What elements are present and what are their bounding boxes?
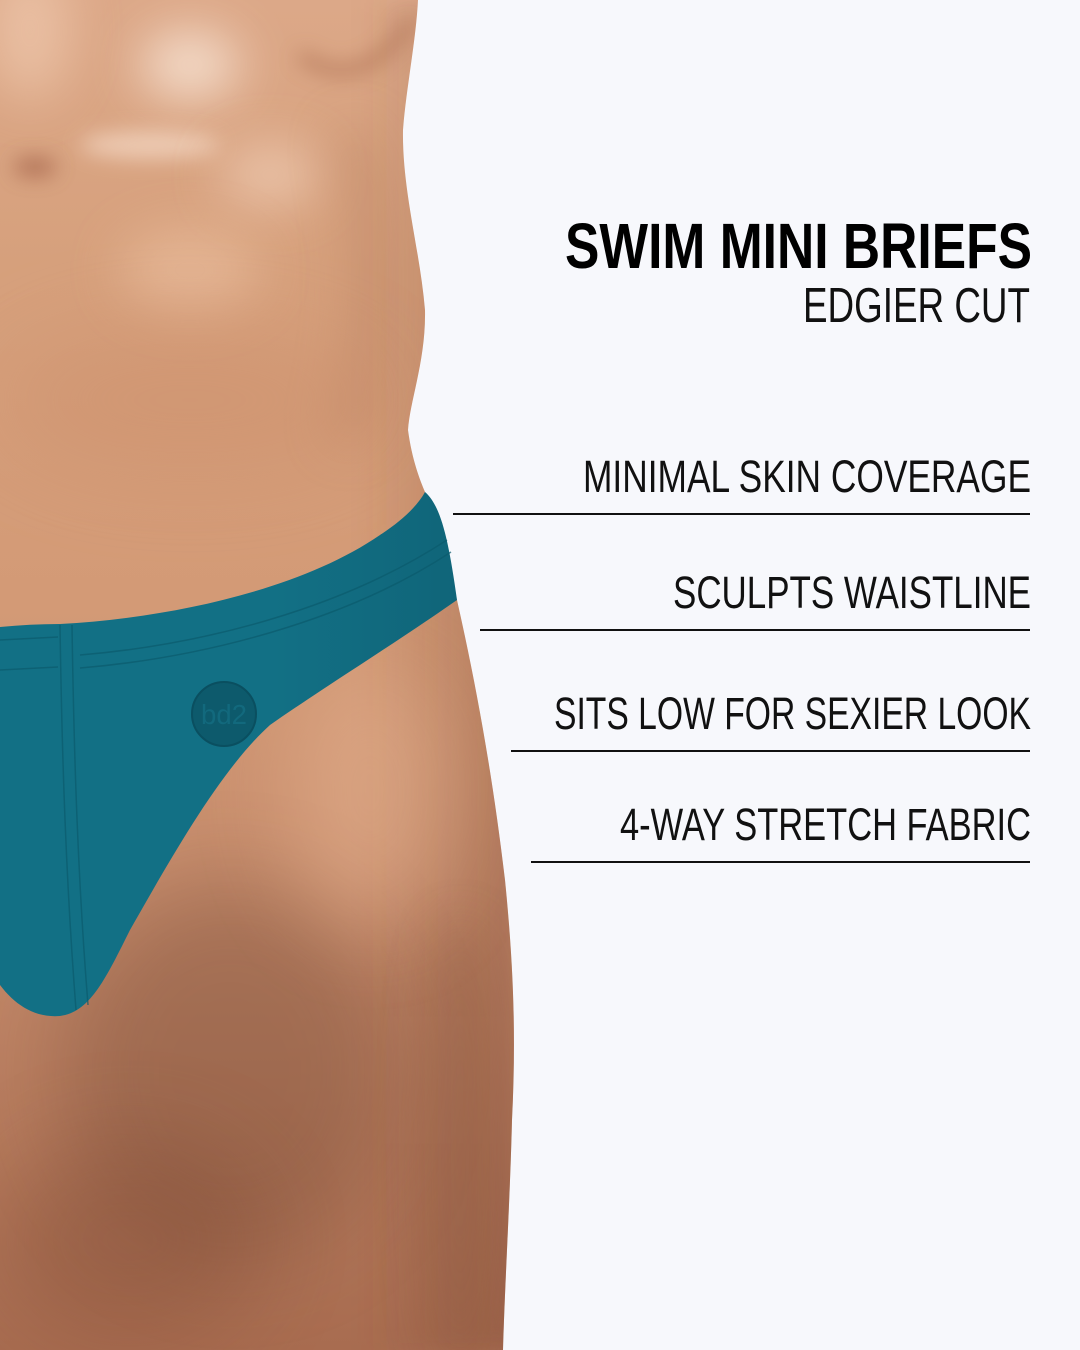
photo: model torso and thigh — [0, 0, 520, 1350]
garment stitching — [0, 540, 451, 1010]
garment: teal swim mini briefs — [0, 492, 457, 1016]
icon: round logo badge: bd2 — [201, 699, 247, 730]
icon: round logo badge — [192, 682, 256, 746]
